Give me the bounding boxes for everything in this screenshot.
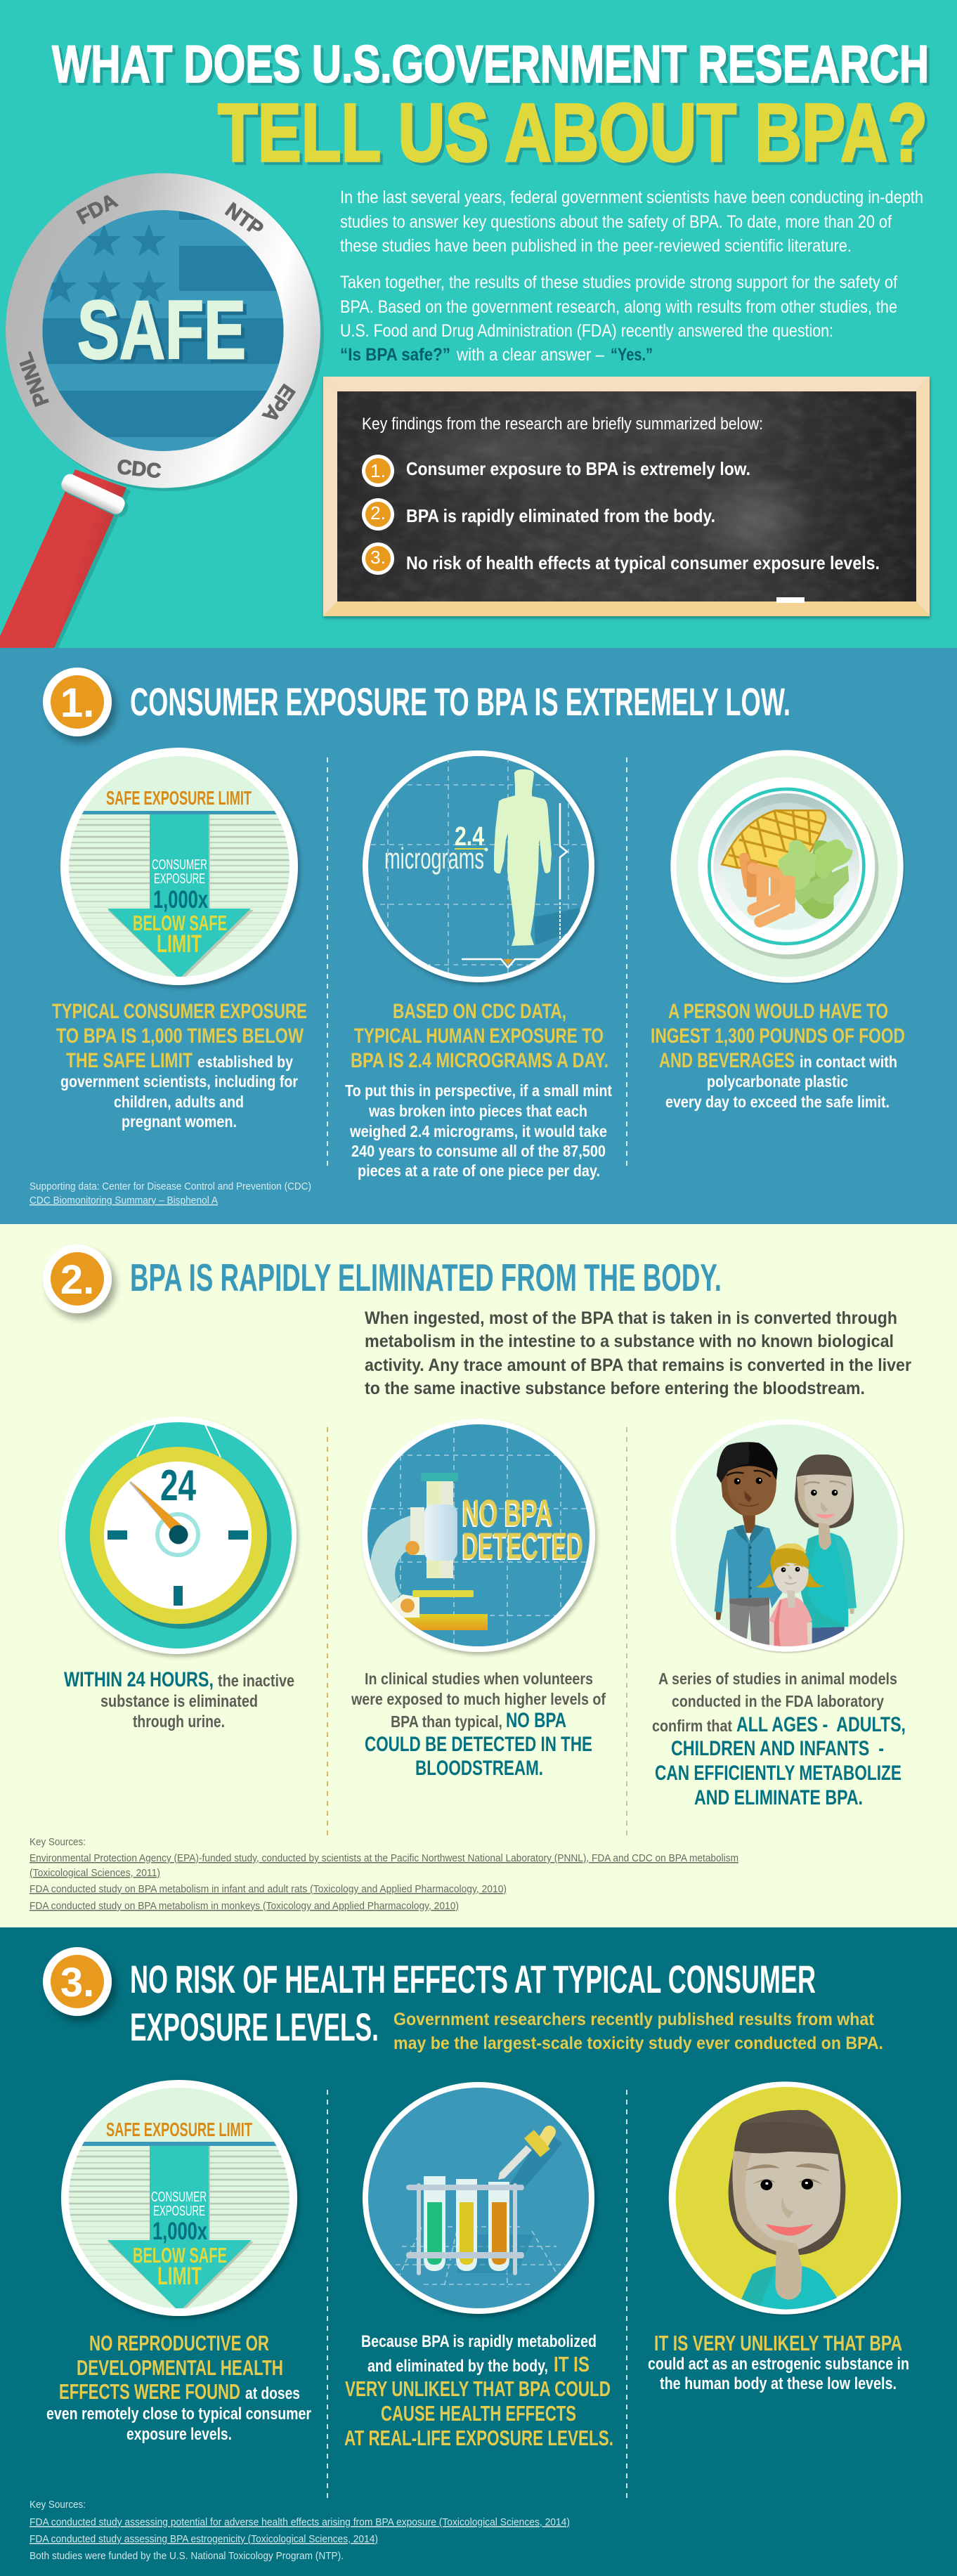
column text: consumer exposure: children, adults and bbox=[114, 1093, 244, 1111]
column text: consumer exposure: TO BPA IS 1,000 TIMES BELOW bbox=[56, 1024, 304, 1048]
text block: metabolism: to the same inactive substance before entering the bloodstream. bbox=[365, 1379, 865, 1398]
icon: dinner plate bbox=[670, 750, 904, 983]
rack legs and tubes bbox=[406, 2176, 524, 2275]
icon: safe exposure limit arrow: EXPOSURE bbox=[154, 871, 205, 887]
column text: 2.4 micrograms: BASED ON CDC DATA, bbox=[393, 1000, 566, 1023]
sources: section 2: Environmental Protection Agency (EPA)-funded study, conducted by scientists at the Pacific Northwest National Laboratory (PNNL), FDA and CDC on BPA metabolism bbox=[30, 1852, 738, 1864]
ring labels: CDC bbox=[116, 456, 162, 483]
text block: toxicity study: may be the largest-scale toxicity study ever conducted on BPA. bbox=[393, 2034, 883, 2053]
icon: safe exposure limit arrow (section 3): EXPOSURE bbox=[153, 2204, 205, 2219]
panel: header background bbox=[0, 0, 957, 648]
finding 3: 3. bbox=[370, 547, 386, 568]
column text: consumer exposure: THE SAFE LIMIT bbox=[66, 1049, 193, 1072]
sources: section 3: FDA conducted study assessing BPA estrogenicity (Toxicological Sciences, 2014) bbox=[30, 2533, 378, 2545]
sources: section 3: Both studies were funded by the U.S. National Toxicology Program (NTP). bbox=[30, 2550, 344, 2562]
column text: animal models: CHILDREN AND INFANTS - bbox=[671, 1737, 884, 1760]
column text: 2.4 micrograms: pieces at a rate of one piece per day. bbox=[358, 1162, 600, 1180]
column text: 2.4 micrograms: weighed 2.4 micrograms, it would take bbox=[349, 1122, 607, 1140]
vegetables bbox=[779, 840, 853, 919]
text block: introduction: with a clear answer – bbox=[456, 345, 604, 365]
icon: safe exposure limit arrow: LIMIT bbox=[157, 930, 202, 958]
icon: clock: 24 bbox=[160, 1462, 196, 1510]
column text: 1,300 pounds: every day to exceed the safe limit. bbox=[665, 1093, 890, 1111]
icon: safe exposure limit arrow (section 3): CONSUMER bbox=[151, 2190, 207, 2205]
icon: safe exposure limit arrow (section 3) bbox=[61, 2080, 301, 2320]
column text: rapidly metabolized: IT IS bbox=[554, 2352, 590, 2376]
column text: consumer exposure: pregnant women. bbox=[122, 1112, 237, 1131]
text block: metabolism: activity. Any trace amount of BPA that remains is converted in the liver bbox=[365, 1355, 911, 1375]
icon: human figure with measure: micrograms bbox=[384, 842, 484, 875]
icon: microscope: NO BPA bbox=[462, 1492, 553, 1534]
column text: animal models: AND ELIMINATE BPA. bbox=[694, 1786, 863, 1809]
icon: safe exposure limit arrow: 1,000x bbox=[153, 886, 208, 913]
finding 2: 2. bbox=[370, 502, 386, 523]
text block: toxicity study: Government researchers recently published results from what bbox=[393, 2010, 875, 2029]
column text: 2.4 micrograms: To put this in perspective, if a small mint bbox=[345, 1081, 612, 1100]
badge: number 2: 2. bbox=[60, 1257, 94, 1303]
sources: section 2 bbox=[30, 1836, 738, 1912]
icon: clock bbox=[59, 1417, 297, 1654]
column text: animal models: conducted in the FDA laboratory bbox=[672, 1692, 884, 1710]
icon: magnifying glass bbox=[0, 173, 324, 648]
badge: number 3: 3. bbox=[60, 1960, 94, 2005]
column text: 2.4 micrograms: was broken into pieces that each bbox=[368, 1102, 587, 1120]
column text: within 24 hours: through urine. bbox=[133, 1712, 225, 1731]
heading: section 3: EXPOSURE LEVELS. bbox=[130, 2005, 379, 2049]
finding 1: 1. bbox=[370, 460, 386, 481]
icon: woman portrait bbox=[669, 2081, 901, 2315]
icon: safe exposure limit arrow: BELOW SAFE bbox=[133, 911, 227, 935]
text block: introduction: U.S. Food and Drug Administration (FDA) recently answered the question: bbox=[340, 321, 833, 341]
column text: 2.4 micrograms bbox=[345, 1000, 612, 1180]
heading: section 3 bbox=[130, 1957, 816, 2049]
column text: rapidly metabolized: AT REAL-LIFE EXPOSURE LEVELS. bbox=[344, 2426, 613, 2450]
column text: no reproductive effects: exposure levels. bbox=[126, 2425, 232, 2444]
column text: clinical studies bbox=[351, 1670, 606, 1780]
column text: rapidly metabolized: CAUSE HEALTH EFFECTS bbox=[381, 2401, 576, 2426]
column text: clinical studies: were exposed to much higher levels of bbox=[351, 1690, 606, 1708]
column text: no reproductive effects: NO REPRODUCTIVE OR bbox=[89, 2331, 269, 2355]
panel: section 3 background bbox=[0, 1927, 957, 2576]
key findings intro: Key findings from the research are briefly summarized below: bbox=[362, 415, 763, 434]
column text: animal models bbox=[652, 1670, 906, 1809]
icon: safe exposure limit arrow (section 3): LIMIT bbox=[157, 2263, 202, 2290]
sources: section 1: CDC Biomonitoring Summary – Bisphenol A bbox=[30, 1195, 218, 1206]
ring labels: NTP bbox=[221, 199, 267, 241]
column text: consumer exposure bbox=[52, 1000, 307, 1131]
text block: introduction: “Yes.” bbox=[611, 345, 653, 365]
ring labels: EPA bbox=[258, 380, 299, 426]
column text: 2.4 micrograms: TYPICAL HUMAN EXPOSURE TO bbox=[354, 1024, 604, 1048]
column text: 1,300 pounds: A PERSON WOULD HAVE TO bbox=[668, 1000, 888, 1023]
icon: microscope: DETECTED bbox=[462, 1526, 583, 1567]
steak bbox=[722, 810, 827, 869]
title bbox=[52, 34, 929, 178]
sources: section 1 bbox=[30, 1180, 311, 1206]
column text: rapidly metabolized: VERY UNLIKELY THAT BPA COULD bbox=[345, 2376, 611, 2401]
sources: section 3: FDA conducted study assessing potential for adverse health effects arising from BPA exposure (Toxicological Sciences, 2014) bbox=[30, 2516, 570, 2528]
column text: clinical studies: In clinical studies when volunteers bbox=[365, 1670, 593, 1688]
panel: chalkboard bbox=[323, 377, 930, 616]
ring labels: PNNL bbox=[13, 349, 53, 409]
column text: 1,300 pounds: AND BEVERAGES bbox=[659, 1049, 795, 1072]
finding 3 bbox=[362, 542, 880, 575]
panel: section 2 background bbox=[0, 1224, 957, 1927]
column text: consumer exposure: TYPICAL CONSUMER EXPOSURE bbox=[52, 1000, 307, 1023]
ring labels: FDA bbox=[74, 190, 121, 229]
panel: section 1 background bbox=[0, 648, 957, 1224]
column text: 1,300 pounds: in contact with bbox=[800, 1053, 897, 1071]
frame bbox=[323, 377, 930, 616]
column text: no reproductive effects: at doses bbox=[245, 2384, 300, 2403]
finding 1 bbox=[362, 455, 750, 487]
man bbox=[715, 1442, 782, 1649]
finding 3: No risk of health effects at typical consumer exposure levels. bbox=[406, 552, 880, 573]
sources: section 2: FDA conducted study on BPA metabolism in monkeys (Toxicology and Applied Pharmacology, 2010) bbox=[30, 1900, 459, 1912]
icon: test tubes and dropper bbox=[365, 2085, 592, 2311]
icon: microscope bbox=[362, 1419, 595, 1652]
column text: clinical studies: COULD BE DETECTED IN THE bbox=[365, 1733, 592, 1756]
column text: animal models: confirm that bbox=[652, 1717, 732, 1735]
column text: rapidly metabolized: and eliminated by the body, bbox=[367, 2357, 548, 2376]
lens ring bbox=[6, 173, 324, 491]
sources: section 3: Key Sources: bbox=[30, 2499, 86, 2511]
badge: number 1: 1. bbox=[60, 680, 94, 726]
icon: safe exposure limit arrow bbox=[60, 748, 302, 989]
icon: safe exposure limit arrow: SAFE EXPOSURE LIMIT bbox=[106, 787, 252, 809]
column text: rapidly metabolized: Because BPA is rapidly metabolized bbox=[361, 2332, 597, 2351]
carrots bbox=[738, 852, 795, 929]
sources: section 3 bbox=[30, 2499, 570, 2562]
column text: within 24 hours: WITHIN 24 HOURS, bbox=[64, 1668, 214, 1691]
girl bbox=[755, 1543, 824, 1649]
column text: animal models: A series of studies in animal models bbox=[658, 1670, 897, 1688]
text block: introduction bbox=[340, 188, 923, 365]
column text: rapidly metabolized bbox=[344, 2332, 613, 2450]
icon: safe exposure limit arrow (section 3): 1,000x bbox=[152, 2218, 207, 2245]
dropper bbox=[498, 2130, 550, 2180]
board bbox=[337, 391, 916, 601]
icon: safe exposure limit arrow: CONSUMER bbox=[152, 857, 207, 873]
column text: 2.4 micrograms: 240 years to consume all of the 87,500 bbox=[351, 1142, 606, 1160]
text block: toxicity study bbox=[393, 2010, 883, 2053]
sources: section 2: FDA conducted study on BPA metabolism in infant and adult rats (Toxicology and Applied Pharmacology, 2010) bbox=[30, 1883, 507, 1895]
finding 2: BPA is rapidly eliminated from the body. bbox=[406, 505, 715, 526]
ring labels bbox=[13, 190, 299, 483]
column text: no reproductive effects bbox=[46, 2331, 311, 2444]
column text: no reproductive effects: EFFECTS WERE FOUND bbox=[59, 2379, 240, 2404]
icon: human figure with measure bbox=[362, 748, 595, 984]
column text: within 24 hours: substance is eliminated bbox=[100, 1692, 258, 1711]
column text: clinical studies: NO BPA bbox=[506, 1709, 566, 1732]
column text: no reproductive effects: DEVELOPMENTAL HEALTH bbox=[77, 2355, 283, 2380]
label: SAFE: SAFE bbox=[77, 284, 246, 377]
sources: section 1: Supporting data: Center for Disease Control and Prevention (CDC) bbox=[30, 1180, 311, 1192]
column text: 1,300 pounds: polycarbonate plastic bbox=[707, 1072, 848, 1091]
sources: section 2: (Toxicological Sciences, 2011) bbox=[30, 1867, 160, 1879]
chalk stick bbox=[776, 597, 805, 603]
woman bbox=[795, 1455, 857, 1649]
text block: metabolism bbox=[365, 1308, 911, 1398]
text block: metabolism: metabolism in the intestine to a substance with no known biological bbox=[365, 1332, 894, 1351]
icon: safe exposure limit arrow (section 3): SAFE EXPOSURE LIMIT bbox=[106, 2119, 252, 2140]
column text: within 24 hours: the inactive bbox=[218, 1672, 294, 1691]
column text: no reproductive effects: even remotely close to typical consumer bbox=[46, 2405, 311, 2424]
column text: 2.4 micrograms: BPA IS 2.4 MICROGRAMS A DAY. bbox=[351, 1049, 608, 1072]
icon: human figure with measure: 2.4 bbox=[455, 822, 484, 852]
finding 2 bbox=[362, 498, 715, 531]
column text: estrogenic substance: the human body at these low levels. bbox=[660, 2374, 897, 2393]
column text: within 24 hours bbox=[64, 1668, 294, 1731]
column text: animal models: ALL AGES - ADULTS, bbox=[736, 1713, 906, 1736]
badge: number 1 bbox=[43, 668, 112, 736]
column text: consumer exposure: established by bbox=[197, 1053, 293, 1071]
finding 1: Consumer exposure to BPA is extremely low. bbox=[406, 458, 750, 479]
lens flag bbox=[39, 207, 288, 453]
text block: metabolism: When ingested, most of the BPA that is taken in is converted through bbox=[365, 1308, 897, 1328]
text block: introduction: these studies have been published in the peer-reviewed scientific literature. bbox=[340, 236, 852, 256]
text block: introduction: “Is BPA safe?” bbox=[340, 345, 450, 365]
icon: safe exposure limit arrow (section 3): BELOW SAFE bbox=[133, 2243, 227, 2268]
column text: clinical studies: BPA than typical, bbox=[391, 1712, 502, 1731]
column text: clinical studies: BLOODSTREAM. bbox=[415, 1757, 543, 1780]
handle bbox=[0, 469, 131, 648]
column text: estrogenic substance bbox=[648, 2331, 909, 2393]
badge: number 3 bbox=[43, 1947, 112, 2016]
sources: section 2: Key Sources: bbox=[30, 1836, 86, 1848]
icon: family bbox=[670, 1419, 903, 1652]
column text: 1,300 pounds bbox=[651, 1000, 905, 1111]
badge: number 2 bbox=[43, 1244, 112, 1313]
column text: consumer exposure: government scientists, including for bbox=[60, 1072, 298, 1091]
